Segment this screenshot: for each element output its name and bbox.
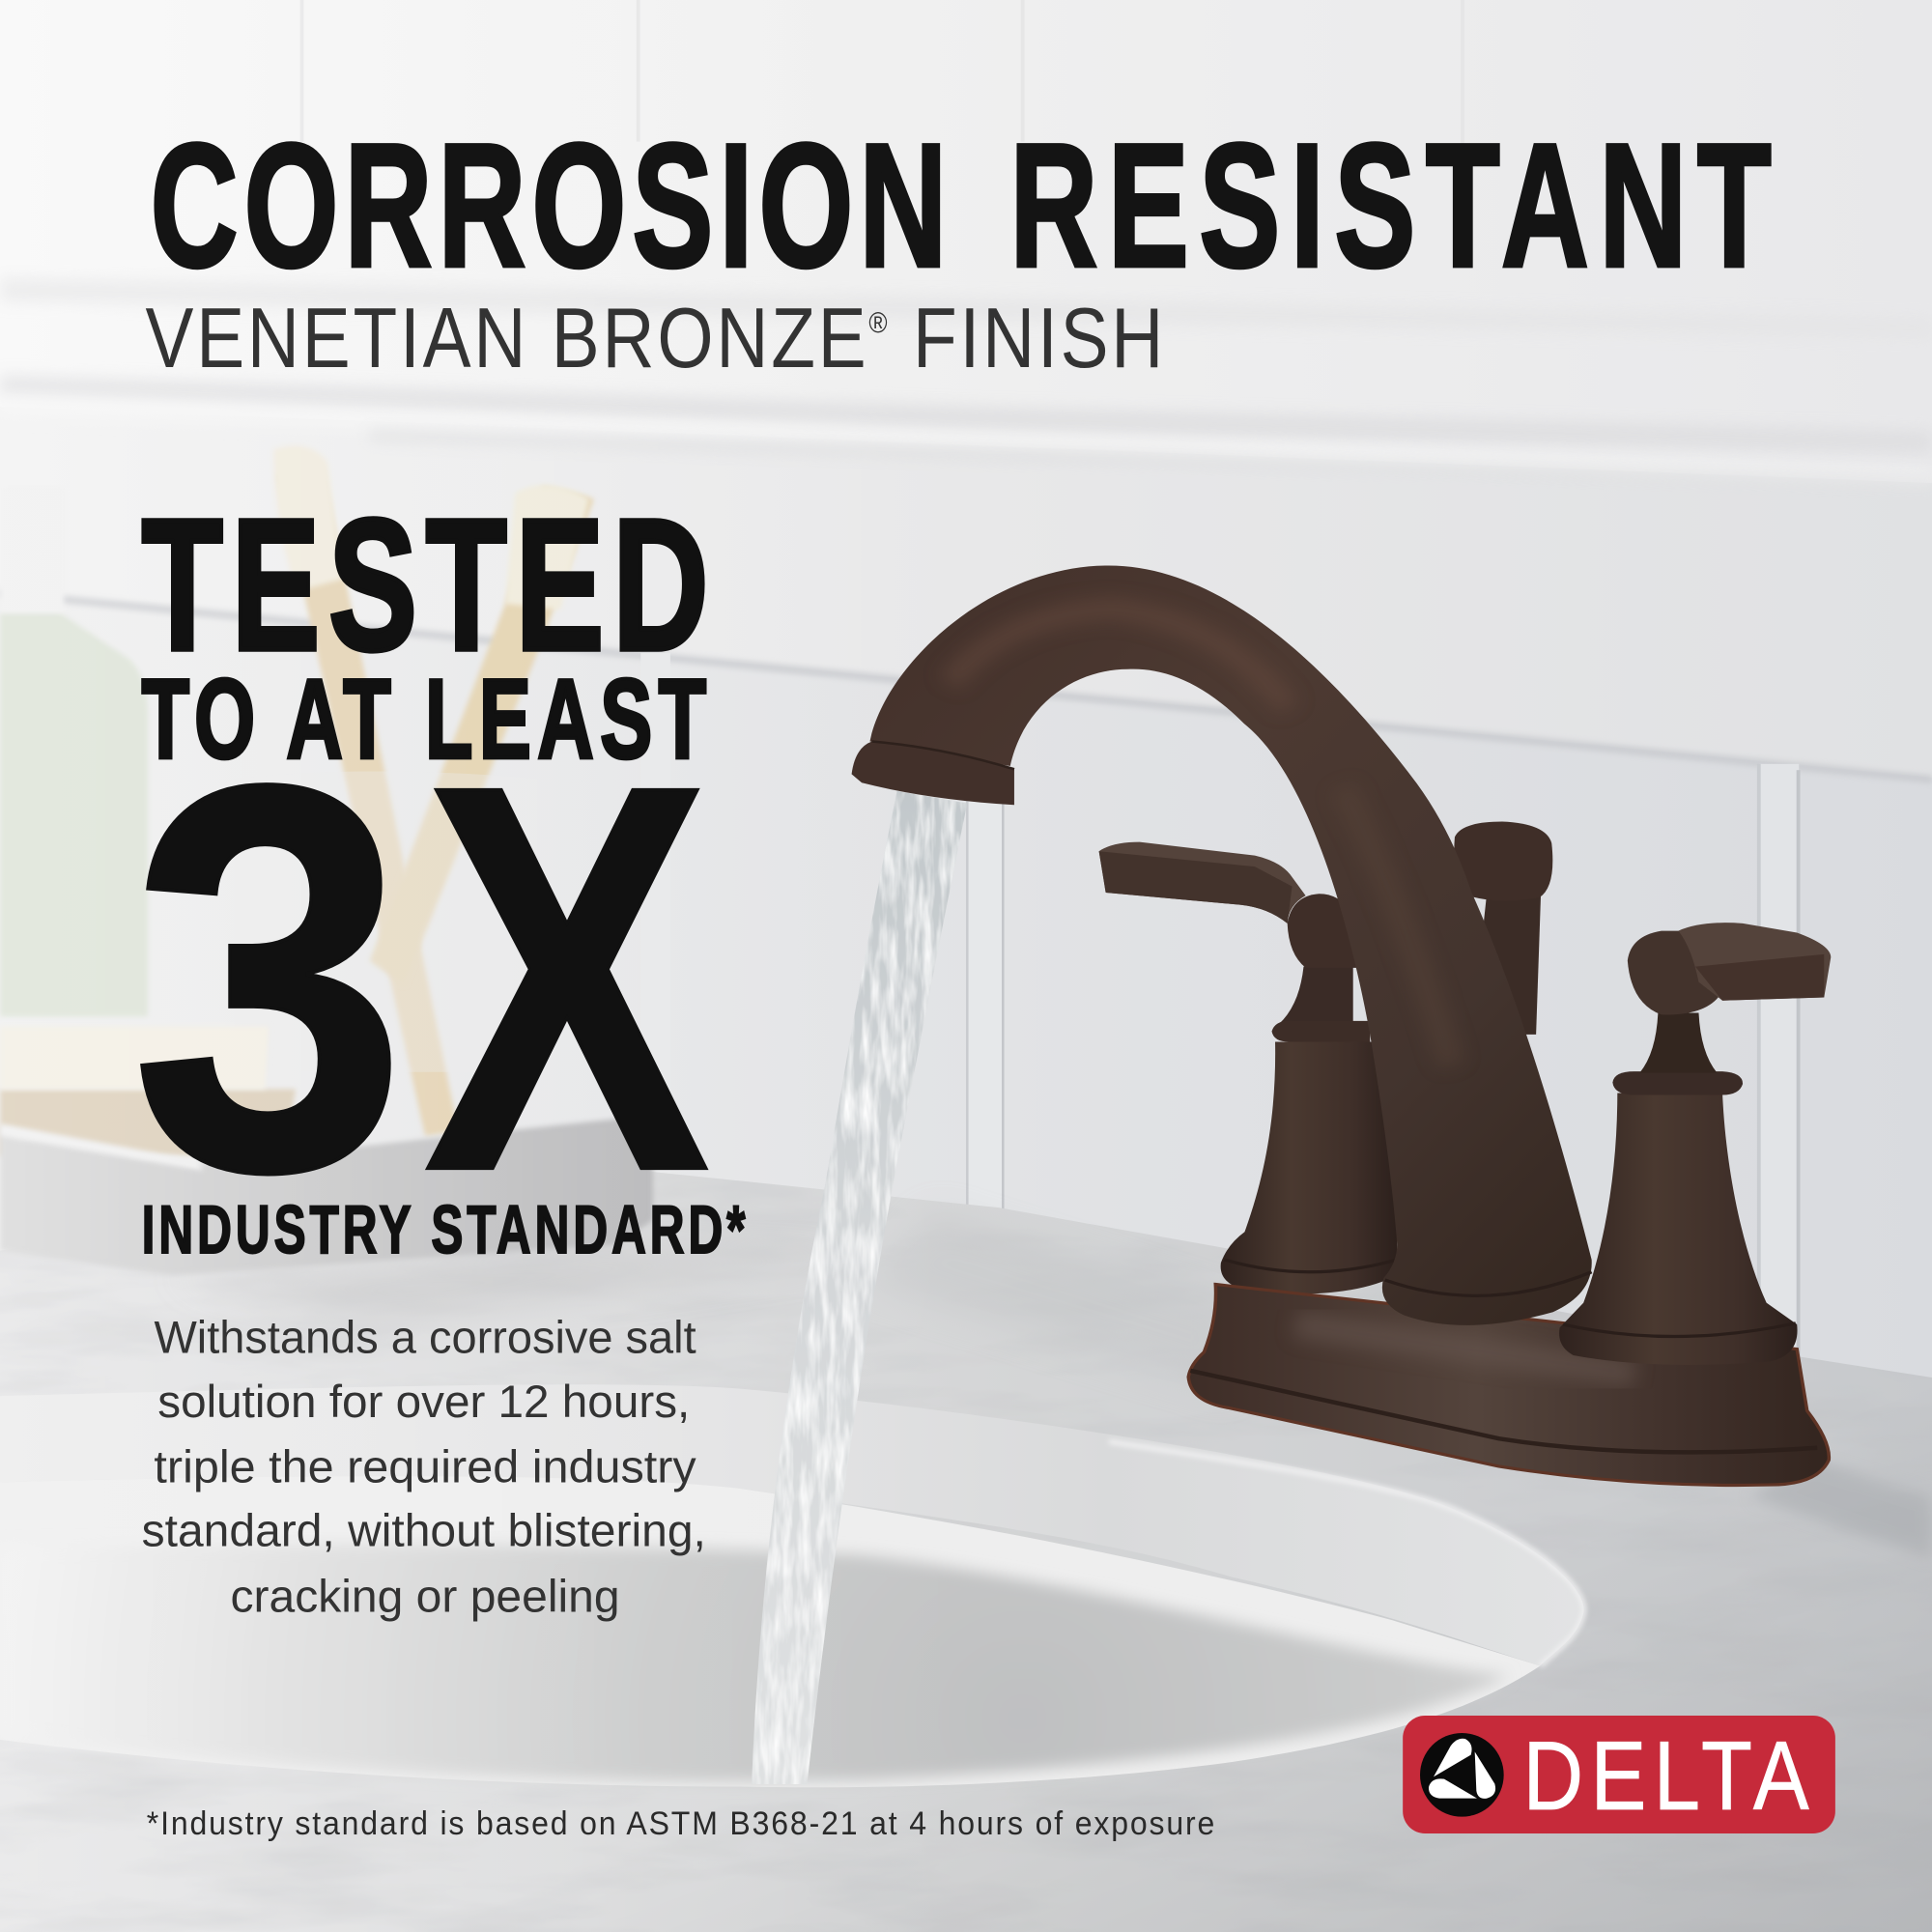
faucet shadow xyxy=(1749,1460,1932,1559)
marble countertop xyxy=(0,1115,1932,1932)
center knob xyxy=(1454,822,1552,1035)
right handle xyxy=(1559,923,1831,1365)
spout xyxy=(852,565,1592,1325)
brush xyxy=(0,1090,296,1155)
faucet xyxy=(852,565,1831,1485)
tray xyxy=(0,1115,863,1324)
base plate xyxy=(1188,1285,1829,1485)
tested: TESTED xyxy=(142,480,709,690)
aerator ring xyxy=(852,742,1014,805)
body text: Withstands a corrosive salt xyxy=(154,1313,696,1364)
left lever handle xyxy=(1099,842,1306,923)
subheading: venetian bronze finish: FINISH xyxy=(890,291,1163,385)
body text: solution for over 12 hours, xyxy=(157,1377,690,1428)
3x: X xyxy=(424,671,712,1286)
glass xyxy=(234,771,537,1072)
body text xyxy=(142,1313,706,1622)
bottle xyxy=(0,612,148,1016)
running water stream xyxy=(752,791,967,1784)
body text: triple the required industry xyxy=(154,1441,696,1492)
white wash overlay behind text xyxy=(0,0,985,1932)
sink basin xyxy=(0,1476,1540,1787)
body text: cracking or peeling xyxy=(231,1571,620,1622)
heading: corrosion resistant: CORROSION xyxy=(151,107,952,304)
subheading: venetian bronze finish: ® xyxy=(868,306,888,340)
logo: delta xyxy=(1403,1716,1835,1833)
3x xyxy=(130,670,712,1286)
left background still-life: bottle, toothbrushes, tray xyxy=(0,445,594,1155)
right lever handle xyxy=(1678,923,1831,1001)
body text: standard, without blistering, xyxy=(142,1506,706,1557)
industry standard: INDUSTRY STANDARD* xyxy=(142,1192,746,1267)
to at least: TO AT LEAST xyxy=(142,657,706,782)
3x: 3 xyxy=(130,670,408,1285)
icon: delta triangle mark xyxy=(1420,1733,1504,1817)
marble sink rim xyxy=(0,1384,1584,1665)
footnote: *Industry standard is based on ASTM B368-21 at 4 hours of exposure xyxy=(147,1805,1214,1843)
toothbrushes xyxy=(277,469,458,1136)
callout: tested to at least 3x industry standard xyxy=(130,480,746,1286)
wordmark: DELTA xyxy=(1523,1721,1809,1830)
subheading: venetian bronze finish: VENETIAN BRONZE xyxy=(146,291,867,385)
heading: corrosion resistant: RESISTANT xyxy=(1009,107,1781,304)
left handle body xyxy=(1099,842,1397,1294)
